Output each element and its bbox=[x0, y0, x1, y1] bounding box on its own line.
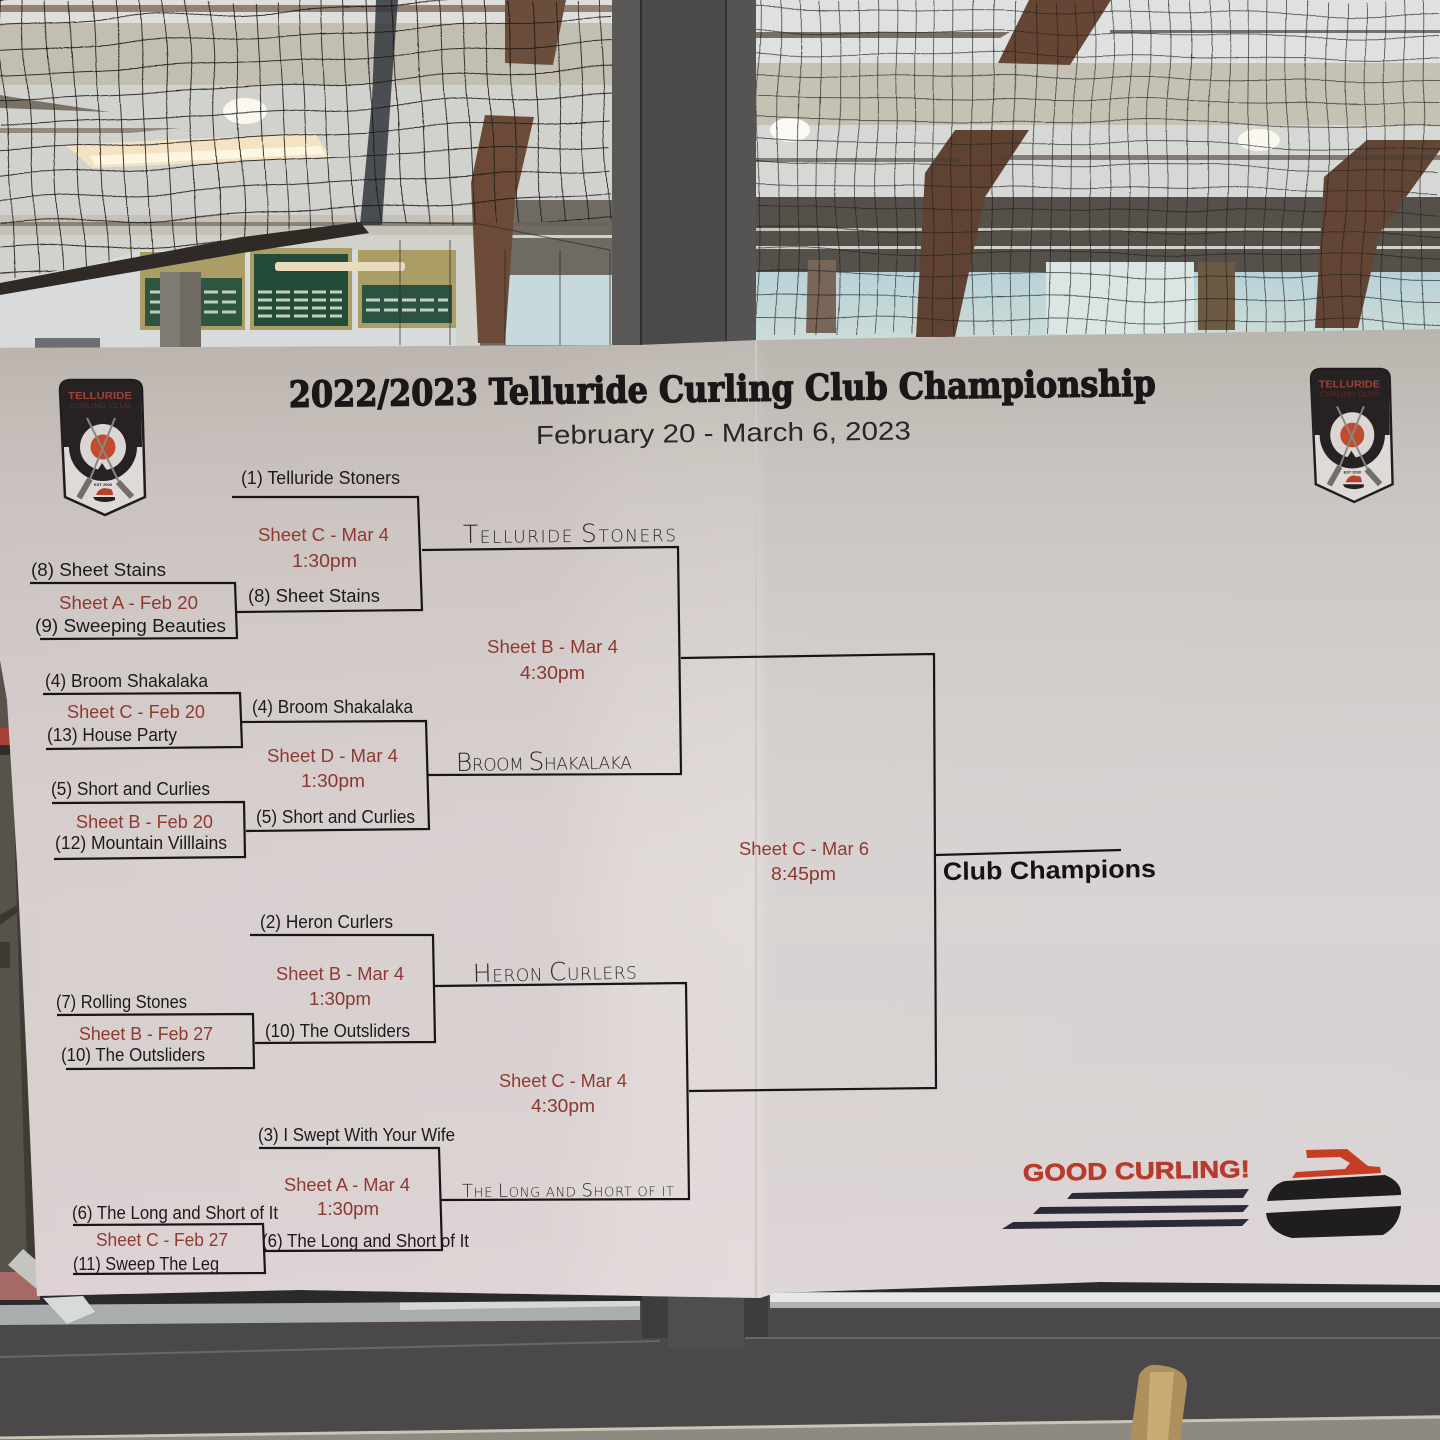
quarterfinal bracket: bottom half, first game: (10) The Outsliders bbox=[265, 1021, 410, 1041]
quarterfinal bracket: top half, second game: 1:30pm bbox=[301, 771, 365, 791]
logo: Telluride Curling Club left: CURLING CLUB bbox=[69, 401, 131, 410]
logo: Telluride Curling Club left bbox=[60, 380, 145, 515]
quarterfinal bracket: bottom half, first game: (7) Rolling Stones bbox=[56, 992, 187, 1012]
final game details bbox=[739, 838, 869, 884]
semifinal: top half: 4:30pm bbox=[520, 663, 585, 683]
quarterfinal bracket: top half, second game: Sheet D - Mar 4 bbox=[267, 745, 398, 766]
quarterfinal bracket: bottom half, second game: 1:30pm bbox=[317, 1199, 379, 1219]
semifinal: bottom half: Sheet C - Mar 4 bbox=[499, 1070, 627, 1091]
quarterfinal bracket: bottom half, second game: (11) Sweep The Leg bbox=[73, 1254, 219, 1274]
quarterfinal bracket: bottom half, second game bbox=[72, 1125, 469, 1274]
quarterfinal bracket: top half, first game: 1:30pm bbox=[292, 551, 357, 571]
quarterfinal bracket: top half, second game: Sheet B - Feb 20 bbox=[76, 811, 213, 832]
window frame: centre mullion bbox=[612, 0, 756, 350]
quarterfinal bracket: top half, second game: Sheet C - Feb 20 bbox=[67, 701, 205, 722]
safety netting bbox=[0, 0, 1440, 345]
quarterfinal bracket: bottom half, first game bbox=[56, 912, 410, 1065]
semifinal: top half: TELLURIDE STONERS bbox=[463, 518, 676, 549]
quarterfinal bracket: top half, first game: (8) Sheet Stains bbox=[248, 586, 380, 606]
wooden broom handle bbox=[1130, 1365, 1187, 1440]
quarterfinal bracket: bottom half, second game: Sheet A - Mar 4 bbox=[284, 1174, 410, 1195]
quarterfinal bracket: top half, second game: (5) Short and Curlies bbox=[256, 807, 415, 827]
good curling sign-off bbox=[1002, 1156, 1250, 1229]
background: arena ceiling seen through the window bbox=[0, 0, 1440, 350]
quarterfinal bracket: bottom half, second game: (3) I Swept With Your Wife bbox=[258, 1125, 455, 1145]
quarterfinal bracket: top half, first game: Sheet A - Feb 20 bbox=[59, 592, 198, 613]
quarterfinal bracket: bottom half, second game: Sheet C - Feb 27 bbox=[96, 1229, 228, 1250]
semifinal: bottom half bbox=[462, 956, 674, 1202]
logo: Telluride Curling Club right: CURLING CLUB bbox=[1320, 389, 1379, 399]
semifinal: top half bbox=[456, 518, 676, 777]
bracket lines bbox=[30, 497, 1121, 1274]
quarterfinal bracket: top half, second game: (13) House Party bbox=[47, 725, 177, 745]
logo: Telluride Curling Club left: TELLURIDE bbox=[68, 390, 132, 402]
quarterfinal bracket: bottom half, second game: (6) The Long and Short of It bbox=[72, 1203, 278, 1223]
semifinal: bottom half: 4:30pm bbox=[531, 1096, 595, 1116]
quarterfinal bracket: bottom half, first game: 1:30pm bbox=[309, 989, 371, 1009]
quarterfinal bracket: top half, first game: (1) Telluride Stoners bbox=[241, 468, 400, 488]
logo: Telluride Curling Club right: EST 2000 bbox=[1344, 469, 1361, 474]
icon: curling stone bbox=[1266, 1149, 1401, 1238]
quarterfinal bracket: top half, second game: (4) Broom Shakalaka bbox=[252, 697, 414, 717]
paper bracket sheet bbox=[0, 329, 1440, 1298]
semifinal: top half: BROOM SHAKALAKA bbox=[456, 746, 632, 777]
scoreboards on the far wall bbox=[35, 248, 456, 348]
good curling sign-off: GOOD CURLING! bbox=[1023, 1156, 1250, 1187]
masking tape on lower left corner bbox=[0, 1249, 95, 1324]
window frame: lower sill bbox=[0, 1275, 1440, 1440]
quarterfinal bracket: bottom half, first game: (2) Heron Curlers bbox=[260, 912, 393, 932]
final game details: 8:45pm bbox=[771, 864, 836, 884]
quarterfinal bracket: bottom half, first game: (10) The Outsliders bbox=[61, 1045, 205, 1065]
quarterfinal bracket: top half, second game: (12) Mountain Villlains bbox=[55, 833, 227, 853]
quarterfinal bracket: top half, second game: (4) Broom Shakalaka bbox=[45, 671, 209, 691]
window frame: left edge behind the sheet bbox=[0, 660, 42, 1300]
quarterfinal bracket: bottom half, first game: Sheet B - Feb 27 bbox=[79, 1023, 213, 1044]
semifinal: top half: Sheet B - Mar 4 bbox=[487, 636, 618, 657]
quarterfinal bracket: bottom half, first game: Sheet B - Mar 4 bbox=[276, 963, 404, 984]
semifinal: bottom half: HERON CURLERS bbox=[473, 956, 637, 988]
quarterfinal bracket: top half, first game bbox=[31, 468, 400, 636]
final game details: Sheet C - Mar 6 bbox=[739, 838, 869, 859]
quarterfinal bracket: top half, first game: (9) Sweeping Beauties bbox=[35, 616, 226, 636]
title: 2022/2023 Telluride Curling Club Championship bbox=[289, 363, 1156, 416]
logo: Telluride Curling Club right: TELLURIDE bbox=[1319, 380, 1380, 391]
semifinal: bottom half: THE LONG AND SHORT OF IT bbox=[462, 1180, 674, 1202]
club champions label: Club Champions bbox=[943, 855, 1156, 886]
quarterfinal bracket: top half, first game: (8) Sheet Stains bbox=[31, 560, 166, 580]
logo: Telluride Curling Club right bbox=[1311, 369, 1393, 502]
logo: Telluride Curling Club left: EST 2000 bbox=[94, 482, 113, 487]
quarterfinal bracket: top half, second game bbox=[45, 671, 415, 853]
subtitle: dates: February 20 - March 6, 2023 bbox=[536, 415, 911, 450]
quarterfinal bracket: top half, second game: (5) Short and Curlies bbox=[51, 779, 210, 799]
quarterfinal bracket: top half, first game: Sheet C - Mar 4 bbox=[258, 524, 389, 545]
quarterfinal bracket: bottom half, second game: (6) The Long and Short of It bbox=[262, 1231, 469, 1251]
ceiling lights bbox=[65, 98, 1280, 271]
